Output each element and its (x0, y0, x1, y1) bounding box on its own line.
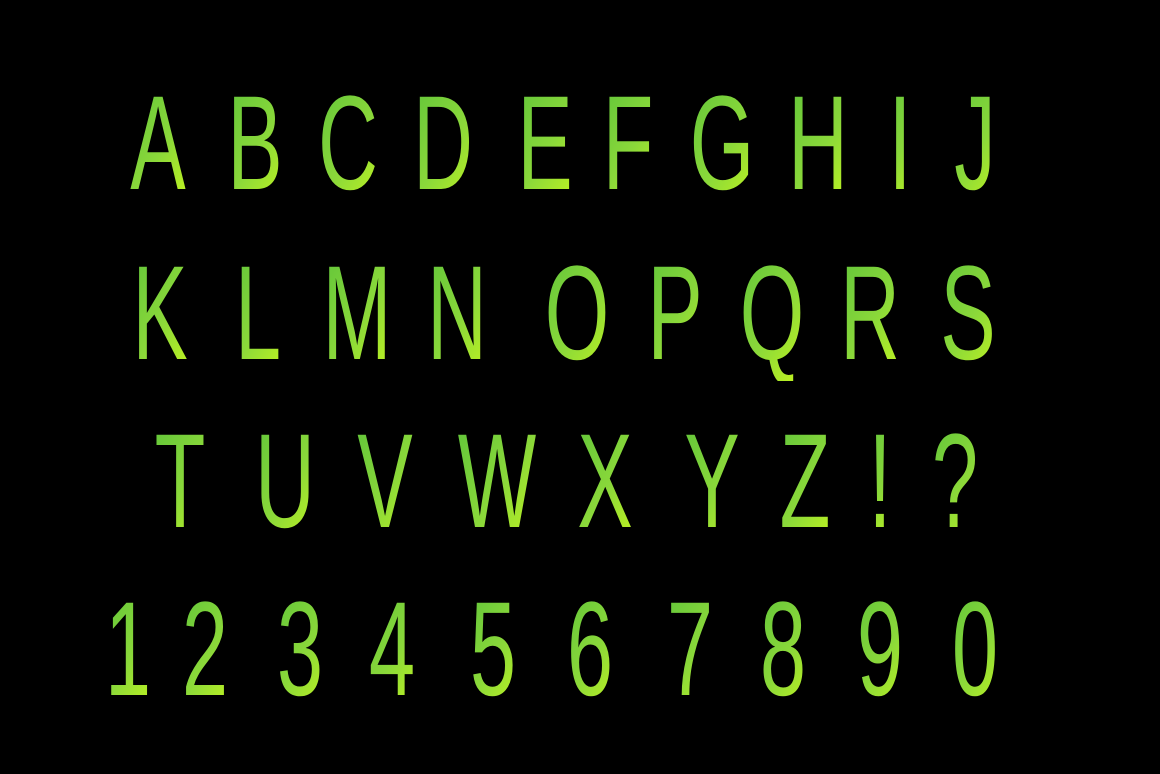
row 1: letters A-J: I (888, 69, 912, 218)
row 2: letters K-S: M (322, 239, 392, 388)
row 4: digits 1-0: 8 (760, 575, 806, 724)
row 3: letters T-Z and punctuation: V (357, 407, 413, 556)
row 1: letters A-J: H (788, 69, 848, 218)
row 2: letters K-S (132, 239, 996, 388)
row 3: letters T-Z and punctuation: Y (684, 407, 740, 556)
row 4: digits 1-0: 9 (857, 575, 903, 724)
row 3: letters T-Z and punctuation: W (458, 407, 536, 556)
row 3: letters T-Z and punctuation (155, 407, 978, 556)
row 4: digits 1-0: 4 (369, 575, 415, 724)
row 3: letters T-Z and punctuation: ? (932, 407, 978, 556)
row 2: letters K-S: O (545, 239, 609, 388)
row 2: letters K-S: K (132, 239, 188, 388)
row 4: digits 1-0: 1 (105, 575, 151, 724)
row 3: letters T-Z and punctuation: U (255, 407, 315, 556)
row 1: letters A-J: D (413, 69, 473, 218)
row 1: letters A-J: G (690, 69, 754, 218)
row 2: letters K-S: S (940, 239, 996, 388)
row 1: letters A-J: C (318, 69, 378, 218)
row 3: letters T-Z and punctuation: Z (780, 407, 830, 556)
row 1: letters A-J: E (517, 69, 573, 218)
row 4: digits 1-0: 5 (470, 575, 516, 724)
row 3: letters T-Z and punctuation: X (577, 407, 633, 556)
row 4: digits 1-0: 7 (667, 575, 713, 724)
row 4: digits 1-0: 6 (567, 575, 613, 724)
row 4: digits 1-0: 3 (277, 575, 323, 724)
row 1: letters A-J (130, 69, 996, 218)
row 4: digits 1-0: 2 (182, 575, 228, 724)
row 1: letters A-J: J (954, 69, 996, 218)
row 4: digits 1-0: 0 (952, 575, 998, 724)
row 2: letters K-S: P (647, 239, 703, 388)
row 1: letters A-J: B (227, 69, 283, 218)
row 1: letters A-J: F (603, 69, 653, 218)
row 2: letters K-S: L (235, 239, 281, 388)
row 2: letters K-S: R (840, 239, 900, 388)
row 4: digits 1-0 (105, 575, 998, 724)
row 2: letters K-S: Q (740, 239, 804, 388)
row 2: letters K-S: N (427, 239, 487, 388)
row 1: letters A-J: A (130, 69, 186, 218)
row 3: letters T-Z and punctuation: T (155, 407, 205, 556)
row 3: letters T-Z and punctuation: ! (868, 407, 892, 556)
